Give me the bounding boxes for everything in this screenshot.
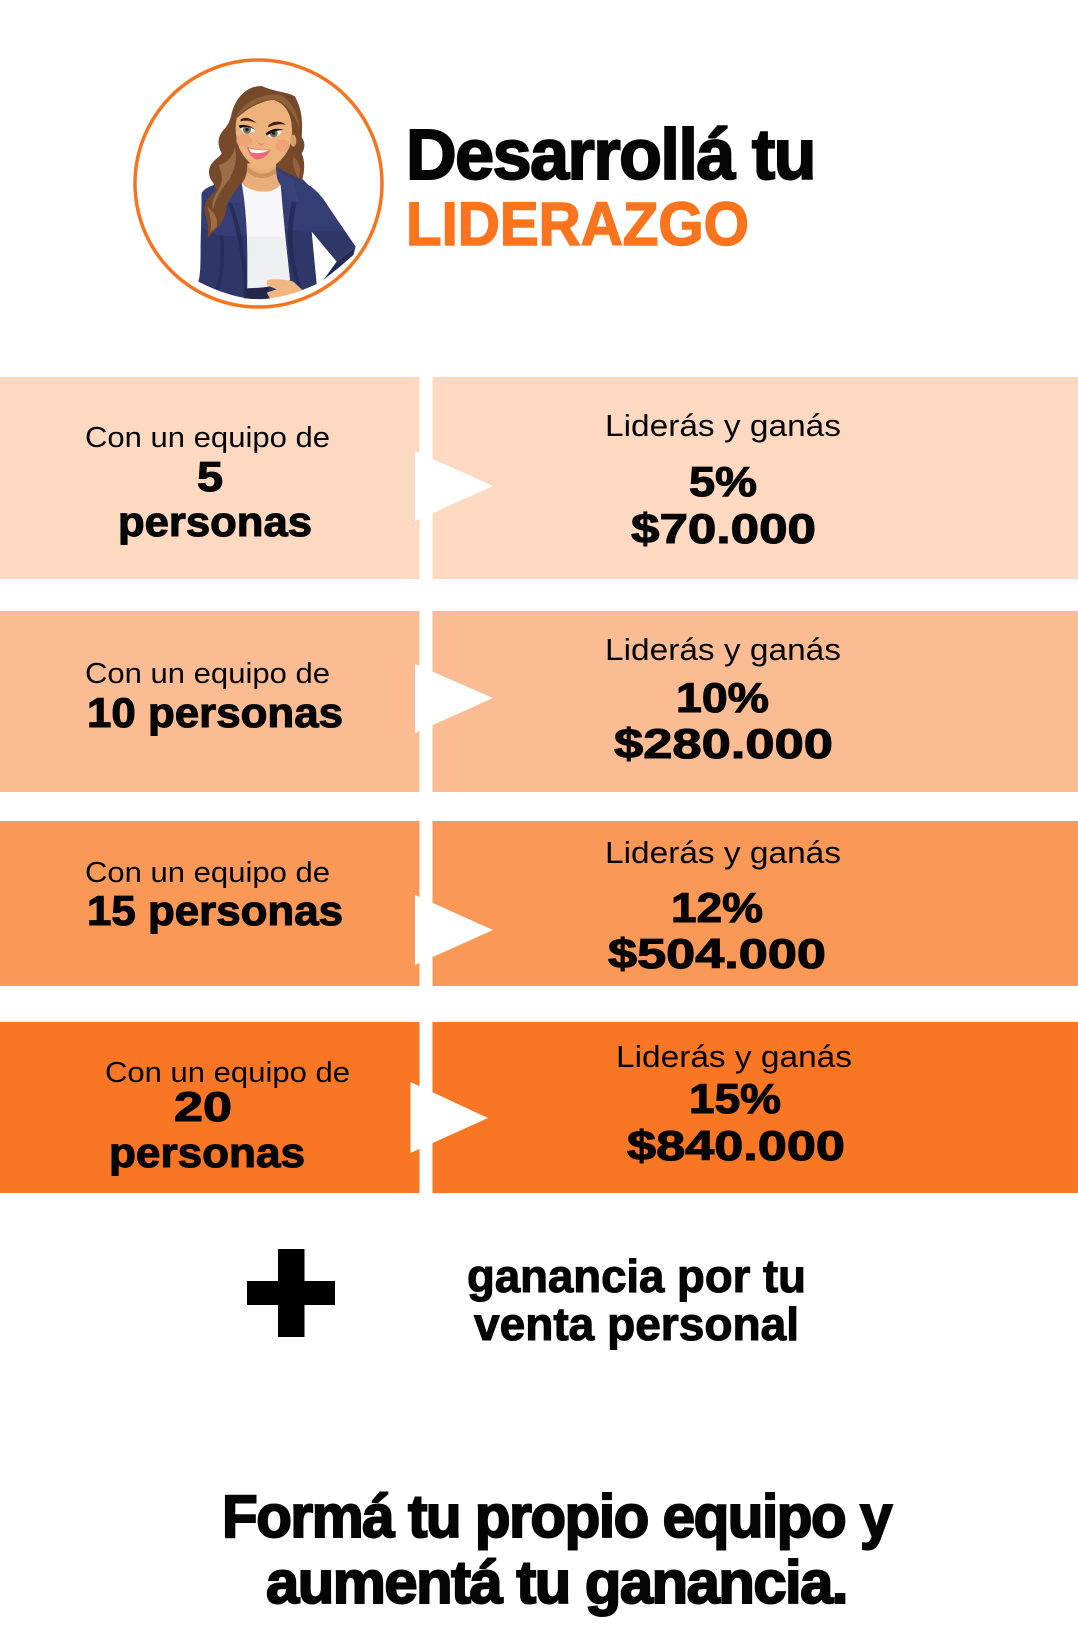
earnings: $70.000 xyxy=(631,505,816,552)
blazer xyxy=(198,165,356,299)
ear xyxy=(290,135,296,147)
neck xyxy=(242,163,281,192)
earnings: 12% xyxy=(671,884,763,931)
hand xyxy=(267,279,302,298)
earnings xyxy=(616,1039,852,1169)
earnings: $504.000 xyxy=(608,930,826,977)
cheeks xyxy=(236,135,252,147)
earnings: Liderás y ganás xyxy=(605,408,841,443)
arrow xyxy=(415,895,493,965)
mouth xyxy=(247,147,271,159)
icon: plus sign xyxy=(247,1249,335,1337)
team label: 5 xyxy=(197,453,223,500)
closing message: aumentá tu ganancia. xyxy=(266,1549,847,1616)
personal sale text xyxy=(467,1250,806,1350)
earnings: 15% xyxy=(689,1075,781,1122)
avatar: woman in navy blazer inside orange circle xyxy=(135,60,382,307)
eyebrows xyxy=(241,118,286,127)
face xyxy=(236,100,292,170)
title: Desarrollá tu xyxy=(406,116,815,195)
nose xyxy=(257,141,265,145)
closing message xyxy=(222,1483,893,1616)
earnings xyxy=(605,835,841,977)
arrow xyxy=(410,1082,488,1153)
team label: 10 personas xyxy=(87,689,343,736)
row 1: team of 5 xyxy=(0,377,1078,579)
hair xyxy=(204,86,304,238)
earnings xyxy=(605,632,841,767)
earnings xyxy=(605,408,841,552)
team label: personas xyxy=(109,1129,305,1176)
title highlight: LIDERAZGO xyxy=(406,190,749,258)
arrow xyxy=(415,664,493,733)
team label: personas xyxy=(118,498,312,545)
arrow xyxy=(415,451,493,521)
eyes xyxy=(239,126,255,133)
row 2: team of 10 xyxy=(0,611,1078,792)
row 3: team of 15 xyxy=(0,821,1078,986)
earnings: Liderás y ganás xyxy=(605,632,841,667)
team label: Con un equipo de xyxy=(85,857,330,889)
blazer lapels xyxy=(227,170,298,203)
team label: 20 xyxy=(174,1083,232,1130)
team label xyxy=(85,422,330,545)
team label: Con un equipo de xyxy=(105,1057,350,1089)
team label xyxy=(85,658,343,736)
earnings: Liderás y ganás xyxy=(616,1039,852,1074)
personal sale text: ganancia por tu xyxy=(467,1250,806,1302)
earnings: $280.000 xyxy=(614,720,833,767)
row 4: team of 20 xyxy=(0,1022,1078,1193)
shirt xyxy=(242,183,290,288)
earnings: 5% xyxy=(689,458,757,505)
personal sale text: venta personal xyxy=(474,1298,799,1350)
team label xyxy=(105,1057,350,1176)
team label: Con un equipo de xyxy=(85,658,330,690)
earnings: $840.000 xyxy=(627,1122,845,1169)
team label: Con un equipo de xyxy=(85,422,330,454)
title xyxy=(406,116,815,258)
team label xyxy=(85,857,343,934)
closing message: Formá tu propio equipo y xyxy=(222,1483,893,1550)
team label: 15 personas xyxy=(87,887,343,934)
earnings: Liderás y ganás xyxy=(605,835,841,870)
earnings: 10% xyxy=(676,674,769,721)
